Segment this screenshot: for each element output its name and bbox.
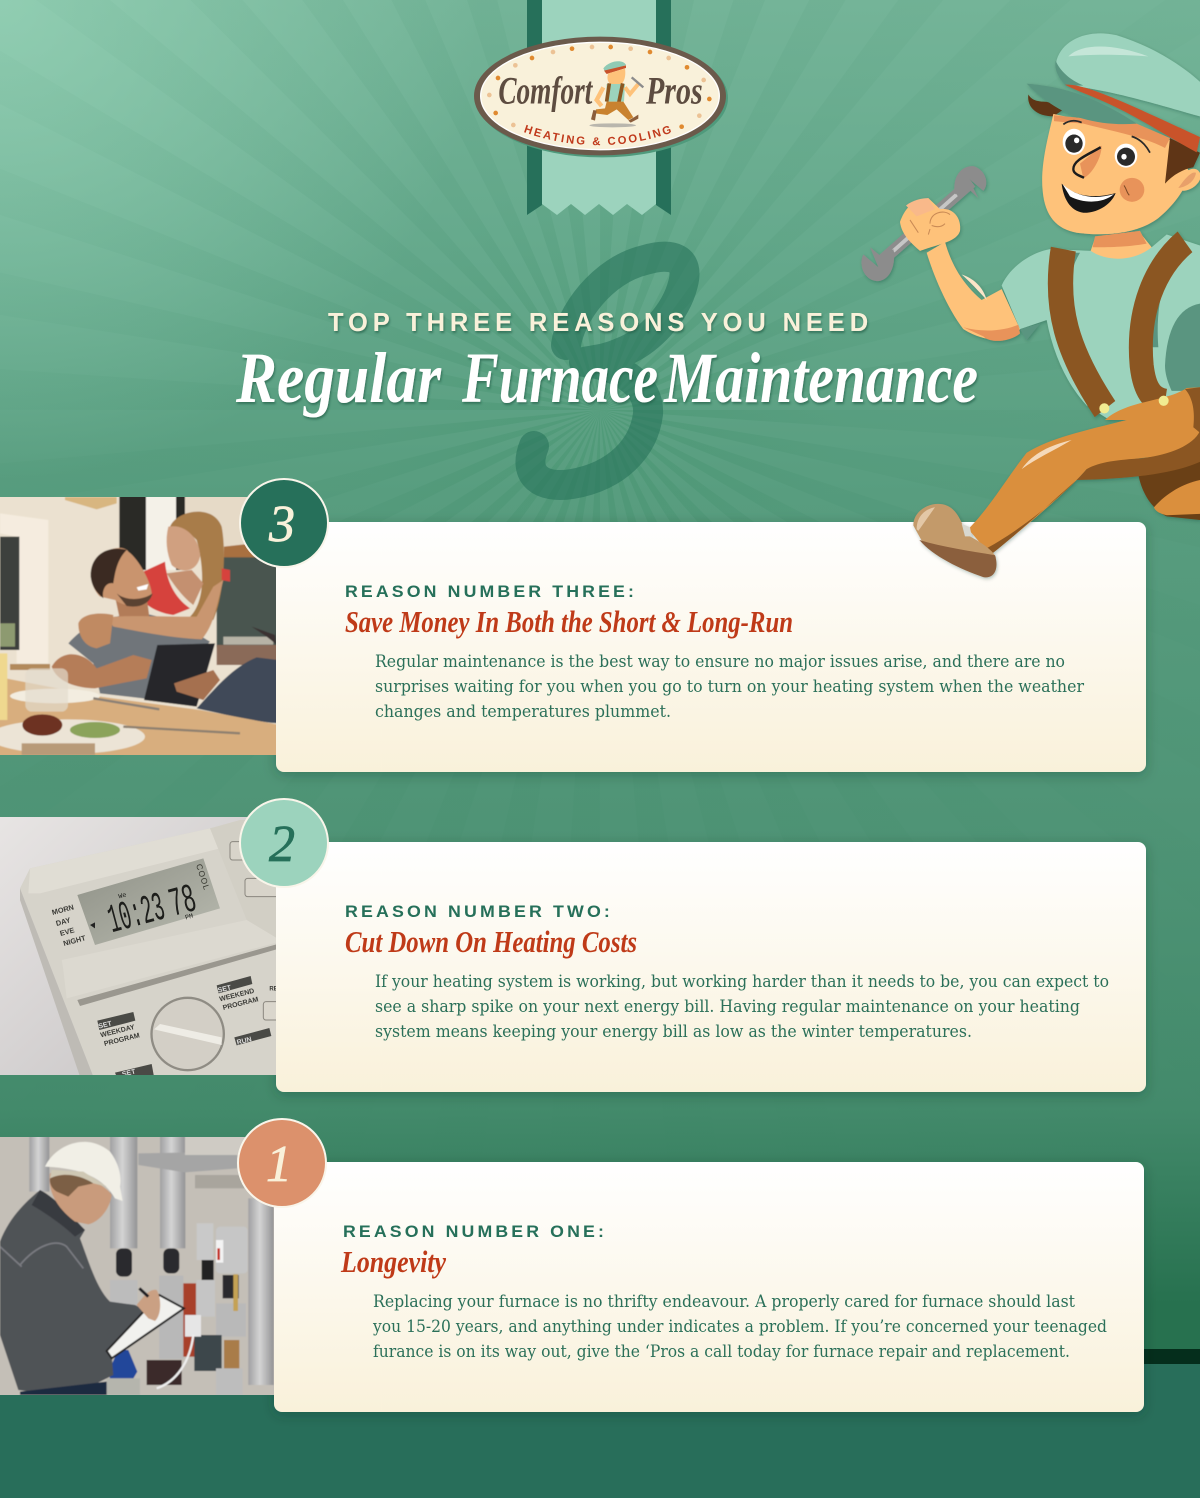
photo: thermostat: COOL — [194, 863, 212, 892]
body text: furance is on its way out, give the ‘Pros a call today for furnace repair and replacement. — [373, 1342, 1070, 1361]
red subtitle: Longevity — [340, 1244, 446, 1279]
photo: thermostat — [0, 813, 283, 1080]
photo: thermostat: SET — [217, 984, 233, 995]
panel: reason three — [0, 479, 1146, 772]
photo: thermostat: RUN — [236, 1036, 253, 1047]
arms — [52, 654, 152, 688]
number badge 1 — [238, 1119, 326, 1207]
eyes — [1063, 129, 1085, 155]
neck — [1091, 233, 1152, 259]
panel: reason one — [0, 1119, 1144, 1412]
body text: surprises waiting for you when you go to turn on your heating system when the weather — [375, 677, 1084, 696]
photo: thermostat: WEEKDAY — [100, 1024, 136, 1039]
photo: thermostat: DAY — [55, 915, 72, 928]
fist — [900, 198, 960, 251]
panel: reason two — [0, 799, 1146, 1092]
ribbon behind logo — [527, 0, 671, 215]
heading: REASON NUMBER TWO: — [345, 902, 613, 921]
photo: thermostat: PM — [184, 912, 194, 921]
body text: system means keeping your energy bill as low as the winter temperatures. — [375, 1022, 972, 1041]
logo: Comfort Pros: HEATING & COOLING — [524, 124, 671, 146]
red subtitle: Cut Down On Heating Costs — [345, 924, 637, 959]
photo: thermostat: MORN — [51, 902, 75, 917]
body text: you 15-20 years, and anything under indicates a problem. If you’re concerned your teenaged — [372, 1317, 1107, 1336]
photo: thermostat: WEEKEND — [219, 988, 255, 1003]
red subtitle: Save Money In Both the Short & Long-Run — [345, 604, 793, 639]
photo: thermostat: We — [117, 891, 127, 900]
shirt — [1002, 235, 1200, 418]
suspenders — [1060, 249, 1105, 409]
subtitle: TOP THREE REASONS YOU NEED — [328, 307, 873, 337]
body text — [375, 972, 1109, 1041]
icon: wrench — [861, 166, 986, 281]
photo: thermostat: 78 — [165, 877, 202, 929]
logo: Comfort Pros: Pros — [645, 68, 703, 112]
main title: Furnace — [461, 338, 658, 418]
photo: couple at kitchen table — [0, 493, 283, 760]
photo: technician with clipboard — [0, 1132, 277, 1398]
back leg — [1138, 456, 1200, 520]
cap — [1027, 33, 1200, 152]
head — [1028, 95, 1200, 234]
photo: thermostat: PROGRAM — [103, 1032, 141, 1048]
body text: If your heating system is working, but working harder than it needs to be, you can expect to — [375, 972, 1109, 991]
hand and clipboard — [107, 1295, 184, 1358]
tablet and pants — [144, 643, 215, 707]
body text: see a sharp spike on your next energy bill. Having regular maintenance on your heating — [375, 997, 1080, 1016]
man — [68, 613, 210, 700]
number badge 1: 1 — [266, 1136, 292, 1193]
photo: thermostat: SET — [98, 1020, 113, 1031]
photo: thermostat: PROGRAM — [222, 996, 259, 1012]
icon: running mascot mini — [589, 61, 643, 127]
logo: Comfort Pros — [474, 36, 728, 158]
body text: Regular maintenance is the best way to ensure no major issues arise, and there are no — [375, 652, 1065, 671]
photo: thermostat: NIGHT — [62, 933, 87, 948]
photo: thermostat: SET — [121, 1068, 137, 1079]
number badge 3: 3 — [268, 496, 295, 553]
trousers — [968, 387, 1200, 555]
nose — [1080, 145, 1102, 178]
card — [276, 522, 1146, 772]
title — [235, 307, 978, 418]
body text: Replacing your furnace is no thrifty endeavour. A properly cared for furnace should last — [373, 1292, 1075, 1311]
main title: Regular — [235, 338, 442, 418]
head and hardhat — [50, 1173, 112, 1224]
heading: REASON NUMBER ONE: — [343, 1222, 607, 1241]
card — [274, 1162, 1144, 1412]
logo: Comfort Pros: Comfort — [498, 68, 593, 112]
mascot: smiling repairman with wrench — [861, 33, 1200, 577]
photo: thermostat: RE — [269, 987, 278, 993]
mouth — [1062, 184, 1116, 213]
main title — [235, 338, 978, 418]
main title: Maintenance — [663, 338, 978, 418]
decorative big number 3 — [530, 257, 685, 485]
photo: thermostat: 10:23 — [103, 886, 170, 945]
card — [276, 842, 1146, 1092]
body text: changes and temperatures plummet. — [375, 702, 671, 721]
photo: thermostat: EVE — [59, 925, 75, 938]
woman — [170, 512, 224, 620]
body text — [375, 652, 1084, 721]
heading: REASON NUMBER THREE: — [345, 582, 637, 601]
cheek — [1120, 178, 1144, 202]
number badge 3 — [240, 479, 328, 567]
number badge 2 — [240, 799, 328, 887]
table — [0, 677, 280, 757]
arm — [927, 242, 1020, 339]
jacket — [0, 1190, 148, 1393]
buttons — [1099, 403, 1109, 413]
body text — [372, 1292, 1107, 1361]
number badge 2: 2 — [269, 816, 295, 873]
shoe — [913, 504, 997, 577]
